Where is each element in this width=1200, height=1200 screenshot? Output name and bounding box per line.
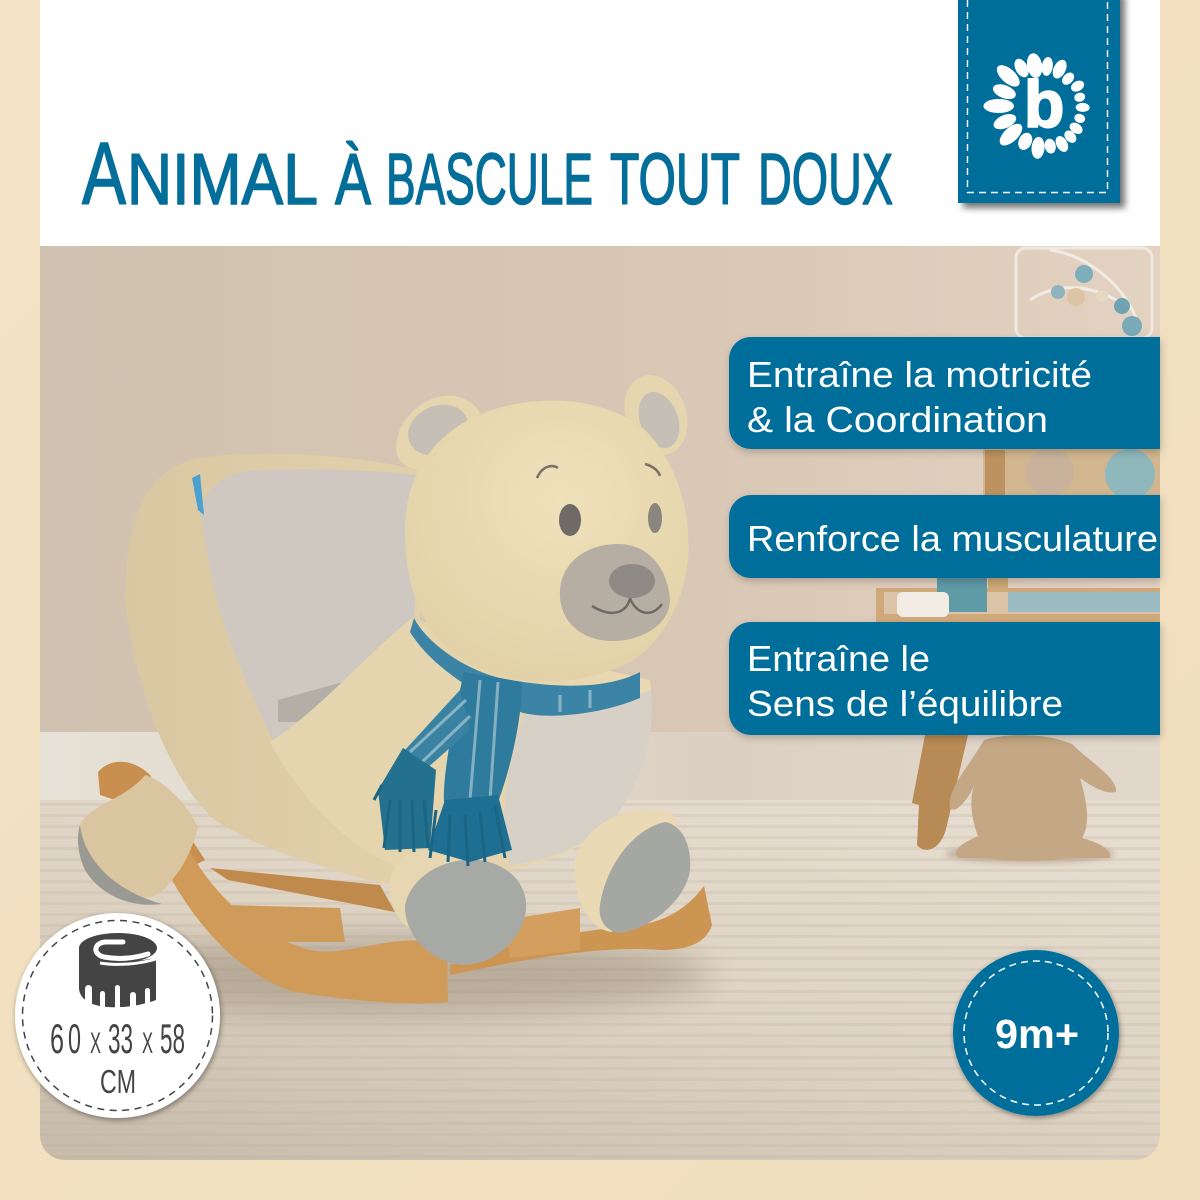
dimensions text: X: [90, 1027, 101, 1060]
stool leg: [912, 735, 968, 850]
scarf: [374, 618, 640, 866]
title: NIMAL: [127, 140, 318, 220]
plush toy in background: [945, 735, 1116, 863]
blue seat label: [192, 474, 204, 515]
dimensions text: CM: [100, 1063, 136, 1100]
bear muzzle: [560, 544, 670, 641]
badge disc: [15, 913, 220, 1118]
title: A: [82, 124, 126, 223]
body cream overlay near neck: [270, 618, 414, 780]
age text: 9m+: [995, 1011, 1079, 1057]
bear eyes: [537, 464, 662, 536]
logo tag: [958, 0, 1120, 203]
callout: motricity: & la Coordination: [747, 399, 1048, 440]
age disc: [953, 950, 1119, 1116]
age stitching: [964, 961, 1108, 1105]
icon: measuring tape: [79, 933, 157, 1012]
bear nose and mouth: [592, 564, 662, 613]
front right foot sole: [600, 822, 690, 933]
belly: [504, 690, 652, 866]
dimensions text: 33: [108, 1015, 133, 1062]
title: [82, 124, 893, 223]
seat buckle strap: [278, 682, 342, 722]
dimensions text: 58: [160, 1015, 185, 1062]
bear right ear: [624, 375, 688, 454]
title: TOUT: [610, 140, 740, 220]
seat and body: [125, 454, 652, 885]
callout: balance: Sens de l’équilibre: [747, 683, 1063, 724]
badge stitching: [22, 920, 212, 1110]
title: DOUX: [758, 140, 893, 220]
front right foot cuff: [575, 809, 676, 932]
wooden shelf with shapes: [983, 448, 1160, 598]
wooden rocker: [98, 762, 712, 1004]
dimensions text: [50, 1015, 185, 1100]
front left foot sole: [405, 860, 526, 965]
callout: muscles: [729, 495, 1160, 578]
tag stitching: [968, 0, 1108, 192]
title: BASCULE: [386, 140, 593, 220]
bead toy on shelf: [1016, 248, 1152, 338]
logo letter b: b: [1024, 67, 1064, 141]
bear back leg: [79, 775, 198, 899]
callout: balance: Entraîne le: [747, 638, 930, 679]
callout: muscles: Renforce la musculature: [747, 518, 1158, 559]
photo: rocking bear in nursery: [40, 246, 1160, 1160]
dimensions text: 0: [68, 1015, 81, 1062]
callout: motricity: Entraîne la motricité: [747, 354, 1092, 395]
carpet: [40, 800, 1160, 1160]
seat cushion: [200, 469, 424, 740]
title: À: [335, 140, 371, 220]
logo petals: [983, 52, 1090, 159]
white title panel: [40, 0, 1160, 246]
tag background: [958, 0, 1120, 203]
front left foot cuff: [390, 884, 414, 929]
dimensions badge: [15, 913, 220, 1118]
back foot sole: [78, 825, 162, 905]
lower shelf with objects: [876, 578, 1160, 622]
callout: balance: [729, 622, 1160, 735]
callout: motricity: [729, 337, 1160, 449]
baseboard: [40, 732, 1160, 802]
dimensions text: 6: [50, 1015, 64, 1062]
dimensions text: X: [142, 1027, 153, 1060]
age badge: [953, 950, 1119, 1116]
bear head: [405, 401, 689, 682]
bear left ear: [396, 395, 483, 472]
wall: [40, 246, 1160, 746]
soft shadow under rocker: [90, 935, 710, 1015]
